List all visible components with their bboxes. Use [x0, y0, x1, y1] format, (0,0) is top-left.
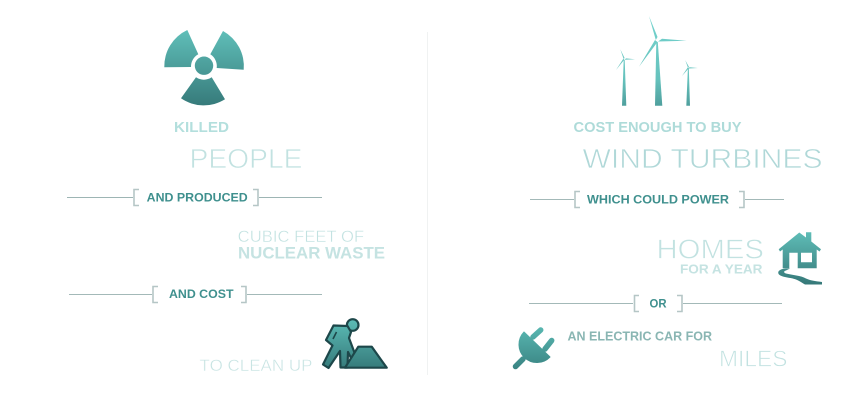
text: cubic feet of: CUBIC FEET OF	[238, 228, 364, 246]
text: an electric car for: AN ELECTRIC CAR FOR	[568, 328, 713, 344]
divider: or	[529, 296, 782, 312]
divider: or: OR	[650, 298, 667, 310]
icon: house with path	[778, 232, 822, 284]
text: people: PEOPLE	[190, 143, 302, 174]
divider: and produced	[67, 190, 322, 206]
text: nuclear waste: NUCLEAR WASTE	[238, 244, 385, 262]
divider: which could power: WHICH COULD POWER	[587, 194, 730, 206]
divider: and cost	[69, 286, 322, 302]
text: wind turbines: WIND TURBINES	[582, 143, 822, 174]
icon: worker digging	[323, 319, 387, 368]
text: for a year: FOR A YEAR	[680, 262, 763, 276]
text: killed: KILLED	[174, 120, 229, 136]
icon: wind turbines	[616, 16, 698, 106]
divider: and cost: AND COST	[169, 289, 234, 301]
text: cost enough to buy: COST ENOUGH TO BUY	[574, 120, 742, 136]
text: miles: MILES	[719, 346, 788, 372]
divider: and produced: AND PRODUCED	[147, 192, 248, 204]
text: homes: HOMES	[656, 234, 764, 264]
icon: electric plug	[516, 330, 552, 366]
divider: which could power	[530, 192, 784, 208]
icon: radiation trefoil	[164, 30, 244, 105]
text: to clean up: TO CLEAN UP	[200, 357, 312, 375]
